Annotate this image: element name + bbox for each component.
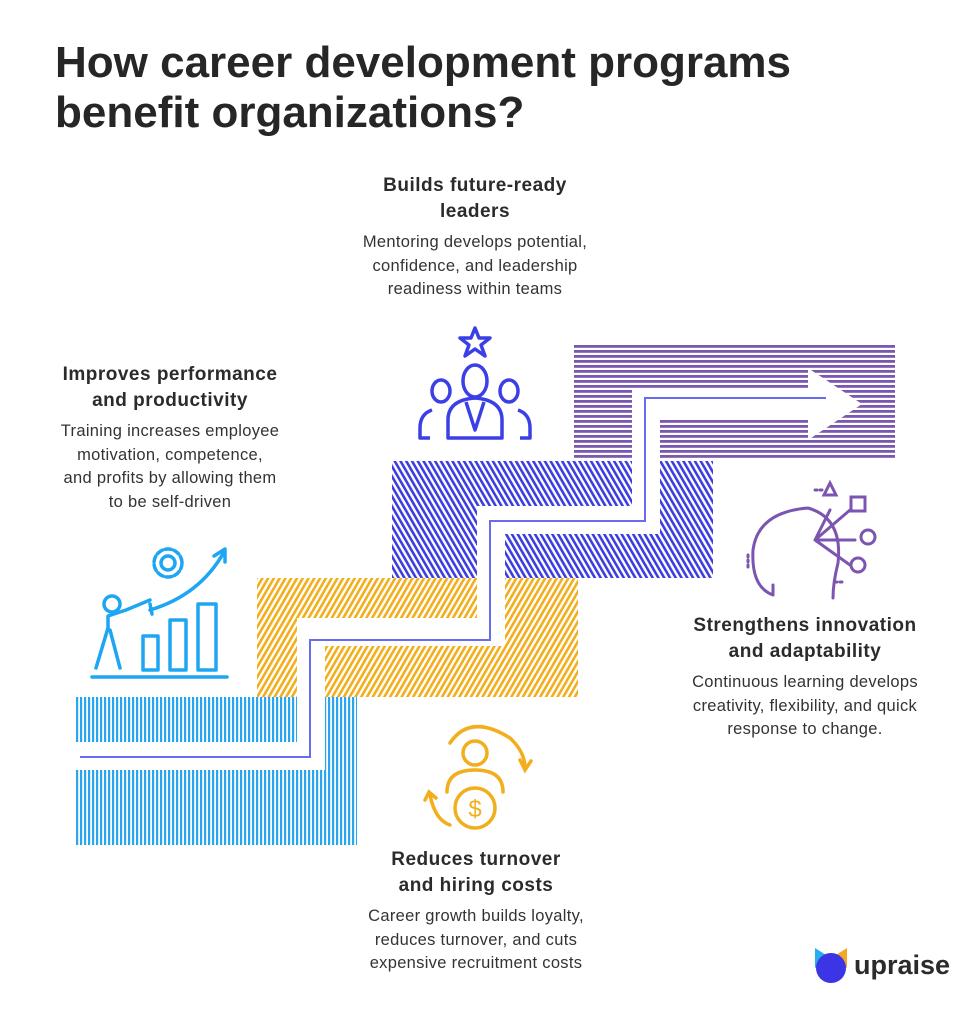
text: innovation: Strengthens innovation <box>693 615 917 636</box>
logo: upraise: upraise <box>854 950 950 980</box>
text: improves performance: Improves performance <box>63 364 277 385</box>
icon: turnover: $ <box>468 796 482 823</box>
step: blue <box>392 461 713 578</box>
title: How career development programs <box>55 38 791 87</box>
title: benefit organizations? <box>55 88 524 137</box>
title <box>55 38 791 137</box>
step: cyan <box>75 697 357 845</box>
text: turnover: reduces turnover, and cuts <box>375 930 577 948</box>
text: innovation: creativity, flexibility, and quick <box>693 696 917 714</box>
text: builds leaders: confidence, and leadership <box>372 256 578 274</box>
text: turnover <box>368 849 584 972</box>
text: turnover: and hiring costs <box>399 875 553 896</box>
text: innovation <box>692 615 918 738</box>
text: innovation: response to change. <box>727 720 883 738</box>
text: builds leaders <box>363 175 587 298</box>
icon: turnover <box>425 727 531 828</box>
icon: innovation <box>748 483 875 598</box>
text: turnover: expensive recruitment costs <box>370 954 582 972</box>
text: turnover: Reduces turnover <box>391 849 561 870</box>
text: turnover: Career growth builds loyalty, <box>368 907 584 925</box>
text: improves performance: and profits by allowing them <box>64 469 276 487</box>
text: improves performance: motivation, competence, <box>77 446 263 464</box>
text: innovation: Continuous learning develops <box>692 673 918 691</box>
text: innovation: and adaptability <box>729 641 881 662</box>
text: improves performance: Training increases employee <box>61 422 279 440</box>
text: builds leaders: readiness within teams <box>388 280 562 298</box>
icon: leaders <box>420 328 530 438</box>
text: builds leaders: leaders <box>440 201 510 222</box>
text: builds leaders: Builds future-ready <box>383 175 567 196</box>
text: improves performance <box>61 364 279 510</box>
logo: upraise <box>815 948 950 983</box>
step: yellow <box>257 578 578 697</box>
text: improves performance: and productivity <box>92 390 248 411</box>
icon: performance <box>92 549 227 677</box>
step: purple <box>574 343 895 460</box>
text: improves performance: to be self-driven <box>109 492 231 510</box>
path: white staircase <box>70 368 862 757</box>
text: builds leaders: Mentoring develops potential, <box>363 233 587 251</box>
